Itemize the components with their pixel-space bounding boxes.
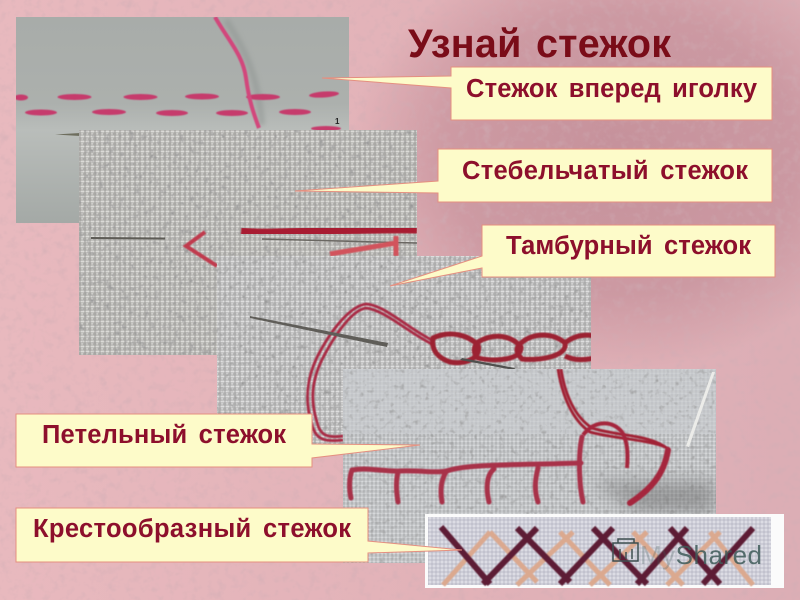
photo: chain stitch on linen: [217, 256, 595, 446]
photo: running stitch on grey fabric: [14, 17, 349, 223]
chevron stitch: [186, 232, 217, 266]
needle: [686, 372, 715, 447]
photo: cross stitch sample with white border: [425, 514, 784, 588]
dark crosses: [441, 527, 753, 584]
callout: stem stitch: Стебельчатый стежок: [462, 157, 748, 185]
photo number: 1: [335, 117, 340, 126]
needle left: [91, 237, 165, 240]
callout: cross stitch: [16, 508, 462, 562]
chain stitch loops: [433, 334, 595, 363]
photo: stem stitch on linen: [79, 130, 417, 355]
photo: blanket stitch on linen: [343, 369, 716, 563]
stem stitch line: [241, 229, 417, 233]
needle: [55, 133, 80, 136]
lighter stitch end: [330, 236, 396, 256]
callout: chain stitch: Тамбурный стежок: [506, 232, 751, 260]
tan crosses: [443, 532, 753, 585]
shadow band: [590, 482, 716, 512]
running stitches: [14, 90, 341, 131]
needle: [250, 316, 388, 347]
blanket stitches: [350, 437, 583, 502]
watermark icon: [613, 539, 638, 561]
working thread and loop: [558, 369, 668, 449]
title: Узнай стежок: [408, 22, 671, 66]
callout: running stitch: Стежок вперед иголку: [466, 75, 758, 103]
needle tip: [460, 358, 515, 370]
working thread: [307, 304, 434, 441]
thread shadow: [226, 20, 262, 125]
watermark text: MyShared: [640, 540, 762, 570]
callout: running stitch: [322, 67, 772, 120]
callout: stem stitch: [295, 149, 772, 202]
callout: blanket stitch: [16, 414, 420, 467]
hanging thread: [215, 17, 259, 128]
callout: blanket stitch: Петельный стежок: [42, 421, 286, 449]
callout: chain stitch: [390, 225, 775, 286]
callout: cross stitch: Крестообразный стежок: [33, 515, 351, 543]
